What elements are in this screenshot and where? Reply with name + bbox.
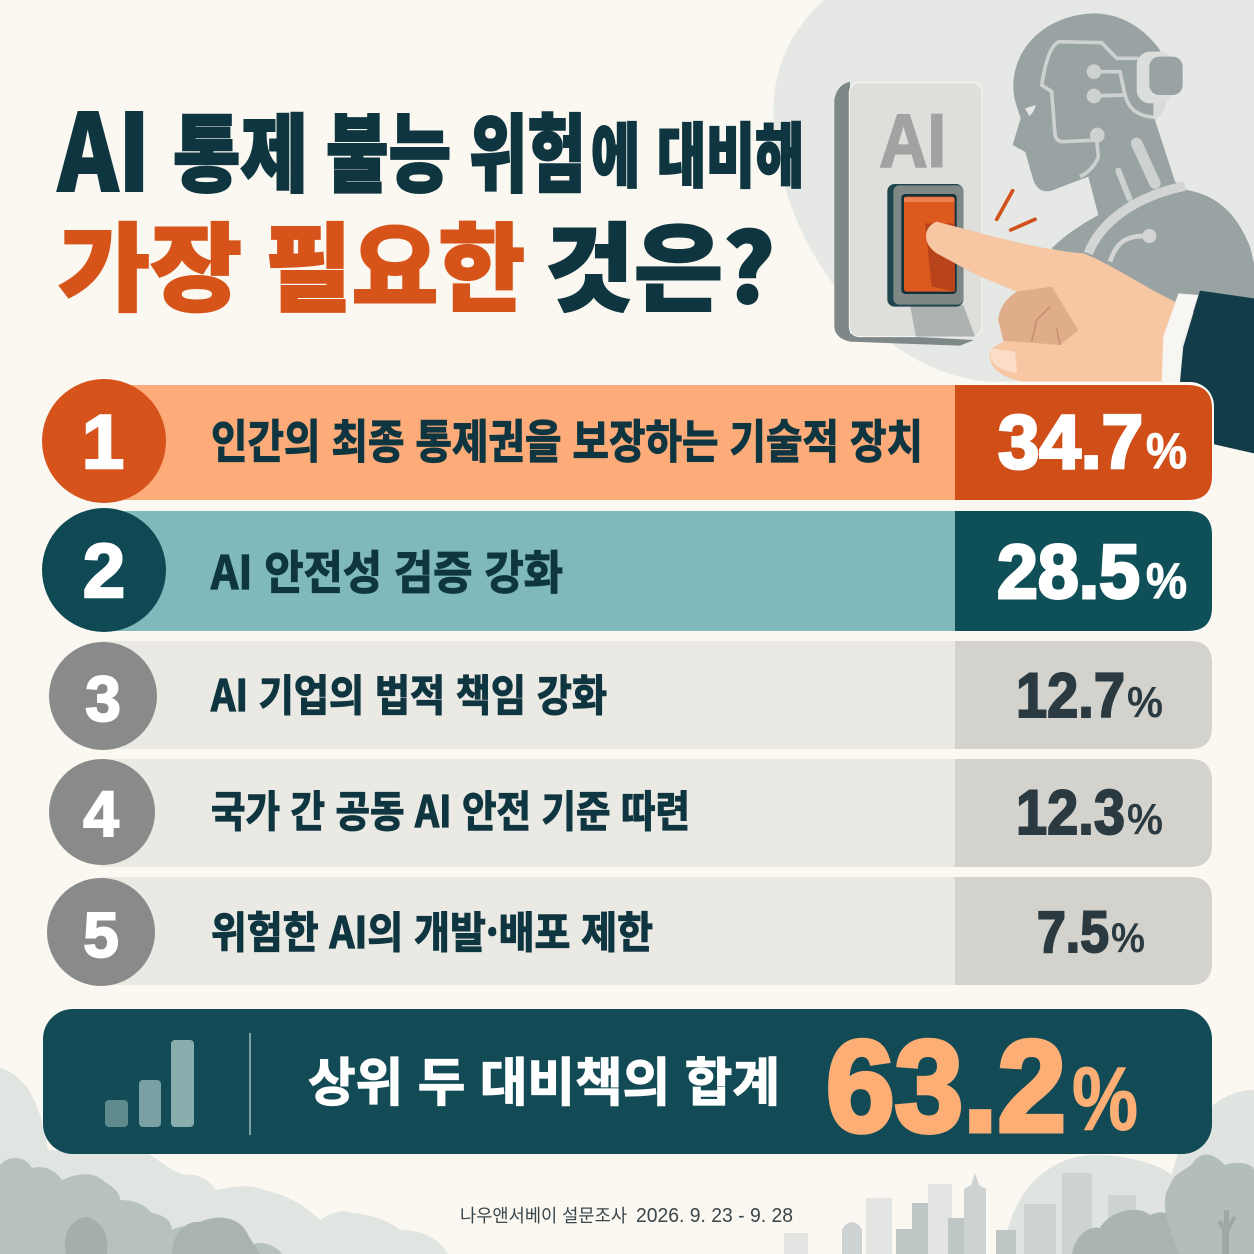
- row 4: 4: [83, 778, 119, 850]
- row 5: 위험한 AI의 개발·배포 제한: [211, 899, 653, 961]
- title line 2: 가장: [58, 192, 242, 331]
- icon: bar chart: [105, 1040, 194, 1127]
- source note: 나우앤서베이 설문조사: [460, 1206, 627, 1226]
- row 1: [42, 379, 1214, 503]
- row 2: AI 안전성 검증 강화: [210, 537, 563, 603]
- row 5: 7.5: [1037, 900, 1109, 965]
- title line 1: AI: [57, 68, 150, 222]
- row 1: 34.7: [998, 400, 1143, 485]
- background circle: [773, 0, 1254, 382]
- spark lines: [997, 191, 1035, 230]
- illustration: AI switch with pointing hand: [773, 0, 1254, 453]
- switch plate: AI: [879, 98, 946, 182]
- source note: 2026. 9. 23 - 9. 28: [636, 1205, 793, 1227]
- title line 1: 에: [591, 101, 640, 202]
- summary panel: %: [1072, 1050, 1138, 1150]
- title line 2: [58, 192, 775, 331]
- title line 2: 필요한: [265, 192, 525, 331]
- summary panel: [43, 1009, 1212, 1159]
- row 4: 12.3: [1016, 778, 1125, 848]
- row 4: %: [1127, 795, 1163, 844]
- row 4: 국가 간 공동 AI 안전 기준 따련: [211, 778, 690, 840]
- row 5: [47, 877, 1212, 986]
- source note: [460, 1205, 793, 1227]
- row 1: %: [1146, 423, 1187, 479]
- row 2: %: [1146, 553, 1187, 609]
- row 3: 12.7: [1016, 661, 1125, 731]
- row 5: %: [1111, 914, 1145, 961]
- row 3: AI 기업의 법적 책임 강화: [210, 662, 607, 724]
- title line 1: [57, 68, 804, 222]
- hand: [926, 222, 1175, 382]
- scenery: right city skyline and trees: [784, 1090, 1254, 1254]
- scenery: left hills and trees: [0, 1068, 448, 1254]
- title line 1: 위험: [469, 87, 586, 210]
- summary panel: 63.2: [826, 1013, 1066, 1159]
- switch plate: [834, 82, 982, 346]
- title line 1: 통제: [173, 87, 308, 210]
- row 1: 인간의 최종 통제권을 보장하는 기술적 장치: [211, 406, 923, 472]
- row 2: 28.5: [997, 530, 1140, 615]
- robot figure: [1013, 13, 1254, 317]
- summary panel: 상위 두 대비책의 합계: [308, 1041, 780, 1116]
- row 3: [49, 641, 1212, 750]
- row 3: 3: [85, 663, 121, 735]
- row 2: [42, 508, 1212, 632]
- title line 2: 것은?: [545, 192, 775, 331]
- row 5: 5: [83, 899, 119, 971]
- shirt cuff: [1162, 293, 1198, 382]
- sleeve: [1180, 291, 1254, 453]
- row 4: [49, 759, 1212, 867]
- title line 1: 불능: [326, 87, 451, 210]
- title line 1: 대비해: [657, 101, 804, 202]
- row 3: %: [1127, 678, 1163, 727]
- row 2: 2: [83, 529, 125, 614]
- row 1: 1: [82, 400, 124, 485]
